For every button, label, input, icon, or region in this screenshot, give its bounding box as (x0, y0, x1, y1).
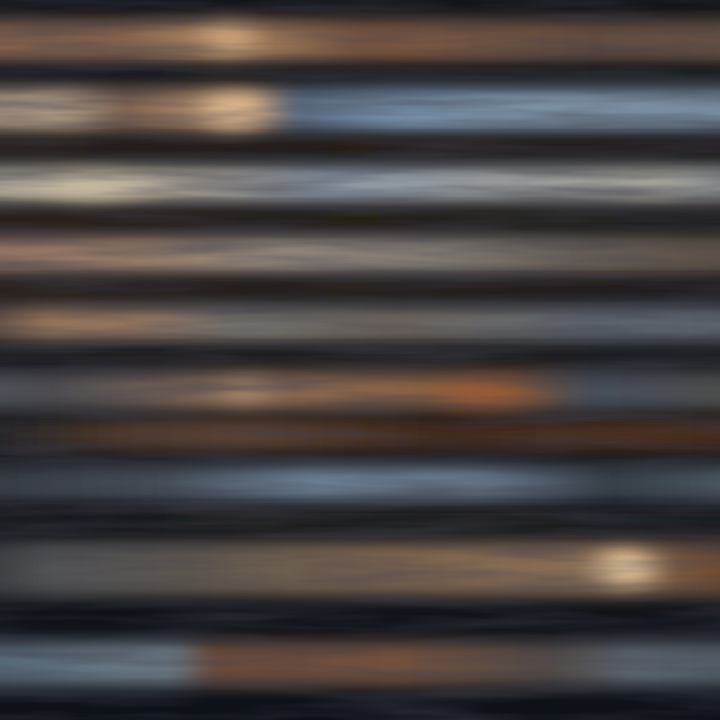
band 6: orange brown (0, 372, 720, 410)
highlight: band 9 glow (596, 550, 656, 586)
highlight: band 1 glow (210, 22, 250, 54)
band 9: warm tan (0, 542, 720, 596)
highlight: band 3 glow (53, 173, 137, 199)
highlight: band 6 glow (223, 378, 267, 402)
gap tone 2 (0, 140, 720, 154)
highlight: band 2 glow (206, 94, 258, 130)
band 2: cream and blue (0, 88, 720, 132)
band 5: tan and grey (0, 306, 720, 342)
band 10: blue and brown (0, 642, 720, 686)
gap tone 3 (0, 210, 720, 226)
band 1: brown (0, 20, 720, 62)
gap tone 1 (0, 68, 720, 78)
gap tone 5 (0, 350, 720, 364)
band 4: tan (0, 236, 720, 274)
gap tone 8 (0, 510, 720, 528)
highlight: band 6 orange (442, 382, 538, 408)
band 8: blue grey (0, 466, 720, 502)
band 3: pale cream (0, 166, 720, 204)
highlight: band 2 left glow (40, 94, 100, 122)
band 7: dark brown (0, 420, 720, 450)
gap tone 4 (0, 282, 720, 296)
